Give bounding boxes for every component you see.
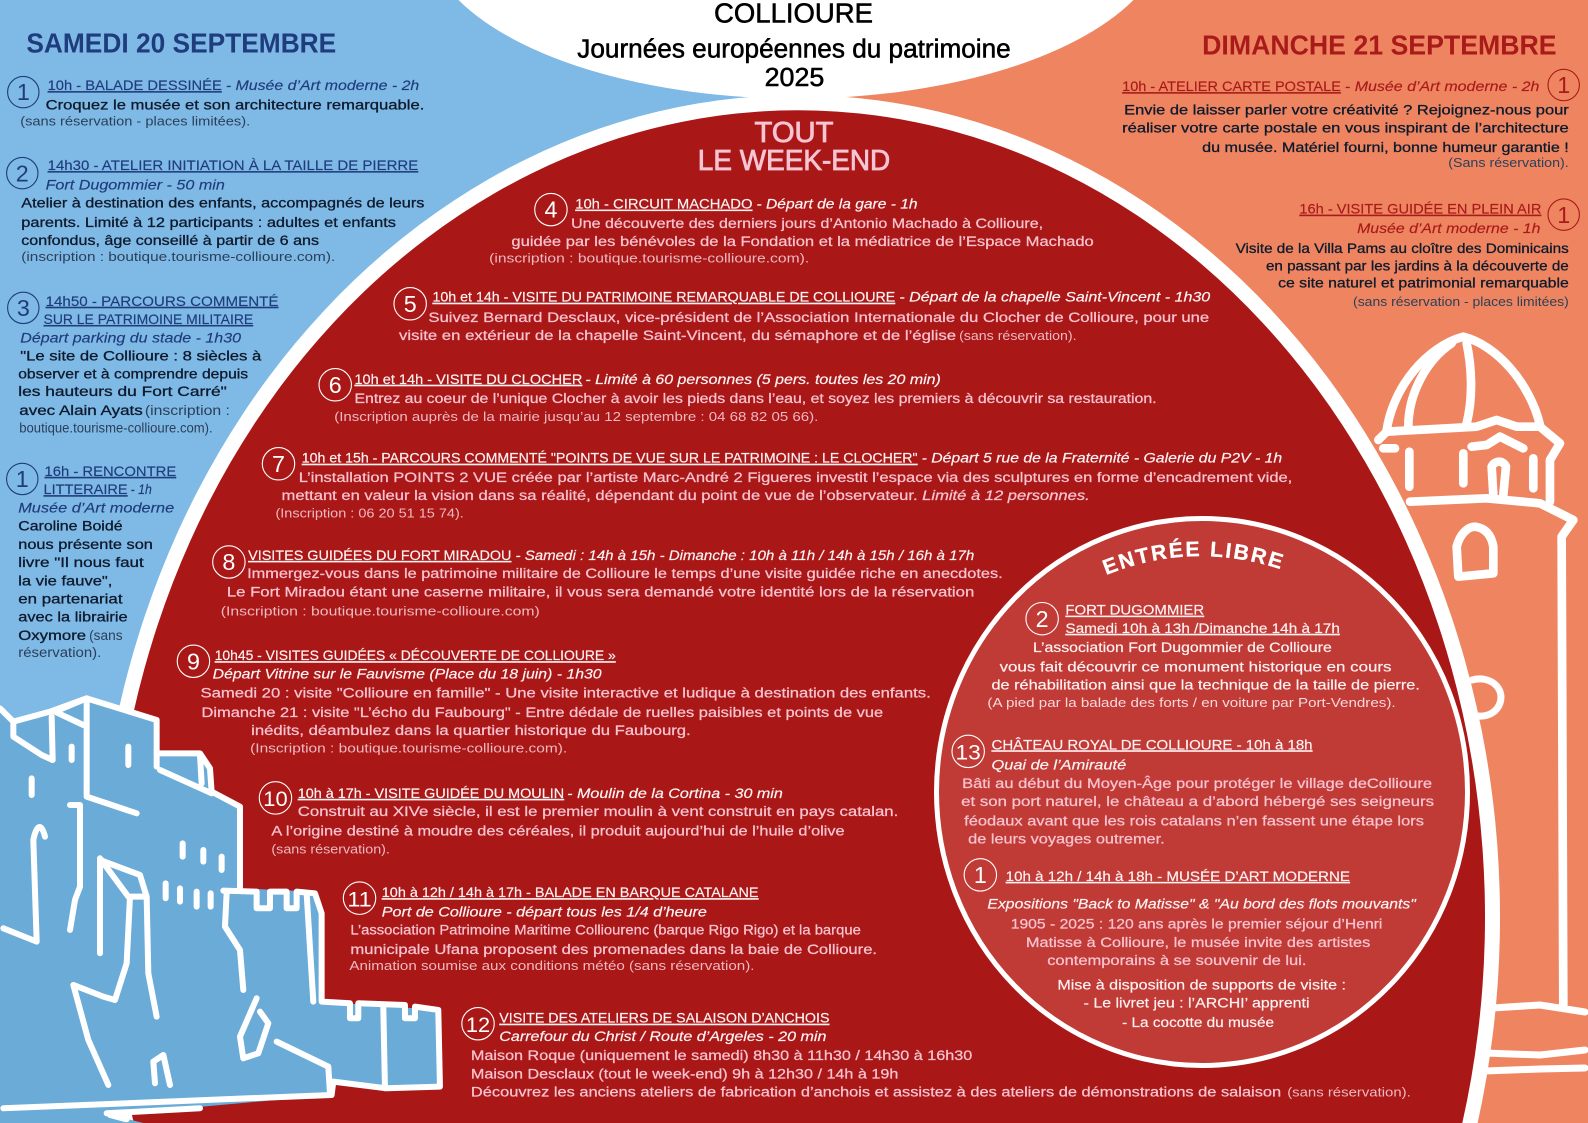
description: Samedi 20 : visite "Collioure en famille" - Une visite interactive et ludique à destination des enfants. <box>201 686 931 702</box>
title <box>577 0 1011 92</box>
event heading: 10h et 15h - PARCOURS COMMENTÉ "POINTS DE VUE SUR LE PATRIMOINE : LE CLOCHER" <box>302 450 918 467</box>
description: parents. Limité à 12 participants : adultes et enfants <box>21 215 396 231</box>
description <box>201 686 931 739</box>
number badge 1: 1 <box>16 466 29 492</box>
panel: week-end events <box>177 193 1411 1101</box>
event place: Quai de l’Amirauté <box>991 758 1126 774</box>
description <box>271 804 898 839</box>
number badge 7 <box>262 448 295 480</box>
note: réservation). <box>18 645 101 661</box>
number badge 2: 2 <box>16 160 29 186</box>
description: Entrez au coeur de l’unique Clocher à avoir les pieds dans l’eau, et soyez les premiers à découvrir sa restauration. <box>354 391 1157 407</box>
event: atelier carte postale <box>1122 69 1579 170</box>
number badge 1 <box>1548 199 1579 230</box>
number badge 9: 9 <box>187 648 200 674</box>
number badge 3 <box>8 292 39 324</box>
number badge 10 <box>259 782 292 814</box>
description: observer et à comprendre depuis <box>18 367 248 383</box>
event heading <box>18 464 176 516</box>
description <box>961 775 1434 847</box>
number badge 7: 7 <box>272 451 285 477</box>
note: (A pied par la balade des forts / en voiture par Port-Vendres). <box>987 695 1396 710</box>
number badge 2 <box>7 157 38 189</box>
number badge 10: 10 <box>263 787 288 811</box>
description: visite en extérieur de la chapelle Saint-Vincent, du sémaphore et de l’église <box>399 328 956 344</box>
event heading: - Musée d’Art moderne - 2h <box>1345 79 1540 95</box>
event heading: - Limité à 60 personnes (5 pers. toutes les 20 min) <box>585 372 941 388</box>
event place: Carrefour du Christ / Route d’Argeles - 20 min <box>499 1029 827 1045</box>
panel: entrée libre content <box>951 538 1434 1031</box>
description <box>471 1048 1281 1101</box>
event 5: patrimoine remarquable <box>394 288 1210 344</box>
event heading: 16h - VISITE GUIDÉE EN PLEIN AIR <box>1299 201 1541 218</box>
event: atelier taille de pierre <box>7 157 424 264</box>
note: (sans réservation). <box>959 328 1077 343</box>
event heading: 10h - ATELIER CARTE POSTALE <box>1122 79 1341 95</box>
number badge 2 <box>1026 602 1058 635</box>
event: balade dessinée <box>8 76 424 129</box>
number badge 12: 12 <box>466 1013 490 1037</box>
description <box>227 566 1003 600</box>
event heading: - Départ 5 rue de la Fraternité - Galerie du P2V - 1h <box>922 451 1282 467</box>
description: contemporains à se souvenir de lui. <box>1047 953 1306 969</box>
background: samedi panel <box>0 0 800 1123</box>
description: en partenariat <box>18 592 123 608</box>
note <box>19 403 230 436</box>
description <box>1122 102 1569 156</box>
event place: Musée d’Art moderne - 1h <box>1357 221 1541 237</box>
visit aids: Mise à disposition de supports de visite : <box>1057 977 1346 993</box>
description: Bâti au début du Moyen-Âge pour protéger le village deCollioure <box>962 775 1432 792</box>
event heading <box>354 372 941 388</box>
event heading: - Départ de la chapelle Saint-Vincent - 1h30 <box>899 290 1210 306</box>
panel: samedi 20 septembre <box>7 28 424 661</box>
description: mettant en valeur la vision dans sa réalité, dépendant du point de vue de l’observateur. Limité à 12 personnes. <box>282 488 1090 504</box>
description: Le Fort Miradou étant une caserne militaire, il vous sera demandé votre identité lors de la réservation <box>227 584 974 600</box>
number badge 11: 11 <box>347 887 372 911</box>
panel: dimanche 21 septembre <box>1122 30 1579 309</box>
note: (sans <box>89 628 123 644</box>
event place: Port de Collioure - départ tous les 1/4 d’heure <box>382 904 707 920</box>
event heading: - Samedi : 14h à 15h - Dimanche : 10h à 11h / 14h à 15h / 16h à 17h <box>515 548 974 564</box>
event: musée d'art moderne <box>964 859 1417 1031</box>
note: (inscription : <box>145 403 230 419</box>
number badge 11 <box>343 882 376 914</box>
event heading: CHÂTEAU ROYAL DE COLLIOURE - 10h à 18h <box>991 736 1313 753</box>
description: L’installation POINTS 2 VUE créée par l’artiste Marc-André 2 Figueres investit l’espace via des sculptures en forme d’encadrement vide, <box>299 470 1292 486</box>
event heading: - 1h <box>131 482 152 498</box>
heading: dimanche: DIMANCHE 21 SEPTEMBRE <box>1202 30 1557 61</box>
event heading: 10h - CIRCUIT MACHADO <box>575 197 752 213</box>
number badge 1: 1 <box>1557 202 1570 228</box>
description: Une découverte des derniers jours d’Antonio Machado à Collioure, <box>571 216 1043 232</box>
number badge 5: 5 <box>404 291 417 317</box>
description: guidée par les bénévoles de la Fondation et la médiatrice de l’Espace Machado <box>511 234 1094 250</box>
description: Suivez Bernard Desclaux, vice-président de l’Association Internationale du Clocher de Collioure, pour une <box>428 310 1209 326</box>
description: de réhabilitation ainsi que la technique de la taille de pierre. <box>991 678 1420 694</box>
description: municipale Ufana proposent des promenades dans la baie de Collioure. <box>350 942 877 958</box>
number badge 6: 6 <box>329 372 342 398</box>
description <box>399 310 1209 344</box>
description <box>511 216 1094 250</box>
description: réaliser votre carte postale en vous inspirant de l’architecture <box>1122 121 1569 137</box>
number badge 1: 1 <box>974 862 987 888</box>
note: (sans réservation - places limitées). <box>20 114 250 129</box>
description <box>1011 917 1382 969</box>
event 13: château royal <box>952 735 1434 847</box>
event heading <box>48 77 419 94</box>
event heading: 10h à 12h / 14h à 18h - MUSÉE D’ART MODERNE <box>1006 868 1350 885</box>
event heading <box>1122 79 1540 95</box>
note: (inscription : boutique.tourisme-collioure.com). <box>21 249 335 264</box>
event heading: 10h et 14h - VISITE DU CLOCHER <box>354 372 582 388</box>
event heading: - Musée d’Art moderne - 2h <box>226 78 419 94</box>
event heading <box>248 547 974 564</box>
note: (sans réservation - places limitées) <box>1353 294 1569 309</box>
note: (sans réservation). <box>271 842 390 857</box>
description: Matisse à Collioure, le musée invite des artistes <box>1026 935 1370 951</box>
heading: tout le week-end <box>698 117 890 177</box>
panel: tout le week-end red dome <box>111 110 1485 1123</box>
number badge 1: 1 <box>1557 72 1570 98</box>
note: (inscription : boutique.tourisme-collioure.com). <box>489 250 809 265</box>
event: rencontre littéraire <box>7 463 176 661</box>
number badge 13 <box>952 735 984 768</box>
number badge 4: 4 <box>544 197 557 223</box>
background: dimanche panel <box>800 0 1588 1123</box>
number badge 8 <box>213 546 245 578</box>
event: visite en plein air <box>1236 199 1579 309</box>
event heading: FORT DUGOMMIER <box>1065 603 1204 619</box>
event heading <box>432 290 1210 306</box>
event 8: fort Miradou <box>213 546 1003 619</box>
number badge 1 <box>8 76 39 108</box>
title line: event name: Journées européennes du patrimoine <box>577 34 1011 64</box>
curved heading: entrée libre: ENTRÉE LIBRE <box>1102 538 1284 575</box>
event heading: SUR LE PATRIMOINE MILITAIRE <box>44 312 253 328</box>
description: confondus, âge conseillé à partir de 6 ans <box>21 233 319 249</box>
event heading <box>44 293 279 328</box>
description: Croquez le musée et son architecture remarquable. <box>46 97 424 113</box>
number badge 6 <box>319 369 351 401</box>
description: Visite de la Villa Pams au cloître des Dominicains <box>1236 241 1569 257</box>
note: (sans réservation). <box>1287 1085 1411 1100</box>
number badge 12 <box>462 1008 494 1040</box>
exhibitions: Expositions "Back to Matisse" & "Au bord des flots mouvants" <box>987 896 1417 912</box>
event heading <box>302 450 1282 467</box>
note: (Inscription : 06 20 51 15 74). <box>275 505 464 520</box>
description <box>18 348 261 419</box>
heading: tout le week-end: LE WEEK-END <box>698 145 890 177</box>
description <box>991 640 1420 694</box>
description: de leurs voyages outremer. <box>968 831 1165 847</box>
event heading: 10h à 17h - VISITE GUIDÉE DU MOULIN <box>298 785 564 802</box>
description: Envie de laisser parler votre créativité ? Rejoignez-nous pour <box>1124 102 1569 118</box>
title cap: white ellipse <box>458 0 1134 99</box>
event: fort Dugommier <box>987 602 1420 710</box>
description: nous présente son <box>18 537 153 553</box>
event heading <box>575 197 918 213</box>
title line: year: 2025 <box>765 62 824 92</box>
description: avec la librairie <box>18 610 128 626</box>
event 6: clocher <box>319 369 1157 424</box>
event place: Départ Vitrine sur le Fauvisme (Place du 18 juin) - 1h30 <box>213 666 602 682</box>
description: L’association Fort Dugommier de Collioure <box>1033 640 1332 656</box>
description <box>21 196 424 249</box>
event heading: 10h et 14h - VISITE DU PATRIMOINE REMARQUABLE DE COLLIOURE <box>432 290 895 306</box>
event heading <box>298 785 783 802</box>
event heading: VISITES GUIDÉES DU FORT MIRADOU <box>248 547 511 564</box>
event heading: - Moulin de la Cortina - 30 min <box>567 786 783 802</box>
number badge 8: 8 <box>222 549 235 575</box>
event: parcours militaire <box>8 292 279 436</box>
description: vous fait découvrir ce monument historique en cours <box>1000 659 1392 675</box>
event heading: VISITE DES ATELIERS DE SALAISON D’ANCHOIS <box>499 1011 829 1027</box>
event heading: 16h - RENCONTRE <box>45 464 176 480</box>
event heading: Samedi 10h à 13h /Dimanche 14h à 17h <box>1065 621 1340 637</box>
event heading: 14h50 - PARCOURS COMMENTÉ <box>46 293 279 310</box>
visit aids <box>1057 977 1346 1031</box>
description: Atelier à destination des enfants, accompagnés de leurs <box>21 196 424 212</box>
description <box>282 470 1292 504</box>
number badge 13: 13 <box>956 740 981 764</box>
description: A l’origine destiné à moudre des céréales, il produit aujourd’hui de l’huile d’olive <box>271 823 845 839</box>
number badge 9 <box>177 645 210 677</box>
event heading: 10h - BALADE DESSINÉE <box>48 77 222 94</box>
event heading: LITTERAIRE <box>44 482 128 498</box>
number badge 1: 1 <box>17 79 30 105</box>
description: Dimanche 21 : visite "L’écho du Faubourg" - Entre dédale de ruelles paisibles et points de vue <box>202 705 883 721</box>
description: féodaux avant que les rois catalans n’en fassent une étape lors <box>964 813 1424 829</box>
number badge 5 <box>394 288 426 320</box>
event place: Fort Dugommier - 50 min <box>46 177 225 193</box>
visit aids: - Le livret jeu : l’ARCHI’ apprenti <box>1084 996 1309 1012</box>
number badge 2: 2 <box>1036 606 1049 632</box>
number badge 1 <box>964 859 997 891</box>
event heading: 14h30 - ATELIER INITIATION À LA TAILLE DE PIERRE <box>48 157 418 174</box>
description: la vie fauve", <box>18 573 112 589</box>
event heading: 10h45 - VISITES GUIDÉES « DÉCOUVERTE DE COLLIOURE » <box>215 647 616 664</box>
description <box>350 923 877 958</box>
description: 1905 - 2025 : 120 ans après le premier séjour d’Henri <box>1011 917 1382 933</box>
note: (Inscription : boutique.tourisme-collioure.com). <box>250 740 567 755</box>
description: avec Alain Ayats <box>19 403 143 419</box>
heading: tout le week-end: TOUT <box>755 117 834 149</box>
description: inédits, déambulez dans la quartier historique du Faubourg. <box>251 723 691 739</box>
description: Maison Roque (uniquement le samedi) 8h30 à 11h30 / 14h30 à 16h30 <box>471 1048 972 1064</box>
heading: samedi: SAMEDI 20 SEPTEMBRE <box>26 28 336 59</box>
note: Animation soumise aux conditions météo (sans réservation). <box>349 958 755 973</box>
event 7: points de vue <box>262 448 1292 520</box>
event 10: moulin <box>259 782 898 857</box>
note <box>18 628 123 661</box>
event heading <box>1065 603 1340 637</box>
description: en passant par les jardins à la découverte de <box>1266 258 1569 274</box>
number badge 1 <box>7 463 38 495</box>
note: (Sans réservation). <box>1448 155 1569 170</box>
event 11: barque catalane <box>343 882 877 973</box>
note: (Inscription : boutique.tourisme-collioure.com) <box>221 604 540 619</box>
event 4: circuit Machado <box>489 193 1094 265</box>
visit aids: - La cocotte du musée <box>1122 1015 1274 1031</box>
description: et son port naturel, le château a d’abord hébergé ses seigneurs <box>961 794 1434 810</box>
event 9: découverte de Collioure <box>177 645 931 755</box>
illustration: castle <box>0 698 440 1123</box>
event heading: 10h à 12h / 14h à 17h - BALADE EN BARQUE CATALANE <box>382 885 759 901</box>
note: boutique.tourisme-collioure.com). <box>19 420 213 436</box>
number badge 4 <box>535 193 567 226</box>
description <box>1236 241 1569 292</box>
description: Découvrez les anciens ateliers de fabrication d’anchois et assistez à des ateliers de démonstrations de salaison <box>471 1085 1281 1101</box>
description: Oxymore <box>18 628 86 644</box>
number badge 3: 3 <box>17 295 30 321</box>
description <box>18 519 153 644</box>
event heading: Musée d’Art moderne <box>18 500 174 516</box>
description: du musée. Matériel fourni, bonne humeur garantie ! <box>1202 140 1569 156</box>
event place: Départ parking du stade - 1h30 <box>20 330 241 346</box>
panel: entrée libre circle <box>936 518 1468 1066</box>
description: Construit au XIVe siècle, il est le premier moulin à vent construit en pays catalan. <box>298 804 898 820</box>
description: Maison Desclaux (tout le week-end) 9h à 12h30 / 14h à 19h <box>471 1066 898 1082</box>
description: "Le site de Collioure : 8 siècles à <box>20 348 261 364</box>
number badge 1 <box>1548 69 1579 101</box>
event 12: ateliers de salaison <box>462 1008 1411 1101</box>
description: ce site naturel et patrimonial remarquable <box>1278 276 1569 292</box>
illustration: clocher tower <box>1378 337 1585 1071</box>
description: Caroline Boidé <box>18 519 123 535</box>
note: (Inscription auprès de la mairie jusqu’au 12 septembre : 04 68 82 05 66). <box>334 409 818 424</box>
description: livre "Il nous faut <box>18 555 144 571</box>
event heading: - Départ de la gare - 1h <box>757 197 918 213</box>
description: L’association Patrimoine Maritime Colliourenc (barque Rigo Rigo) et la barque <box>350 923 861 939</box>
description: les hauteurs du Fort Carré" <box>18 384 227 400</box>
description: Immergez-vous dans le patrimoine militaire de Collioure le temps d’une visite guidée riche en anecdotes. <box>247 566 1003 582</box>
